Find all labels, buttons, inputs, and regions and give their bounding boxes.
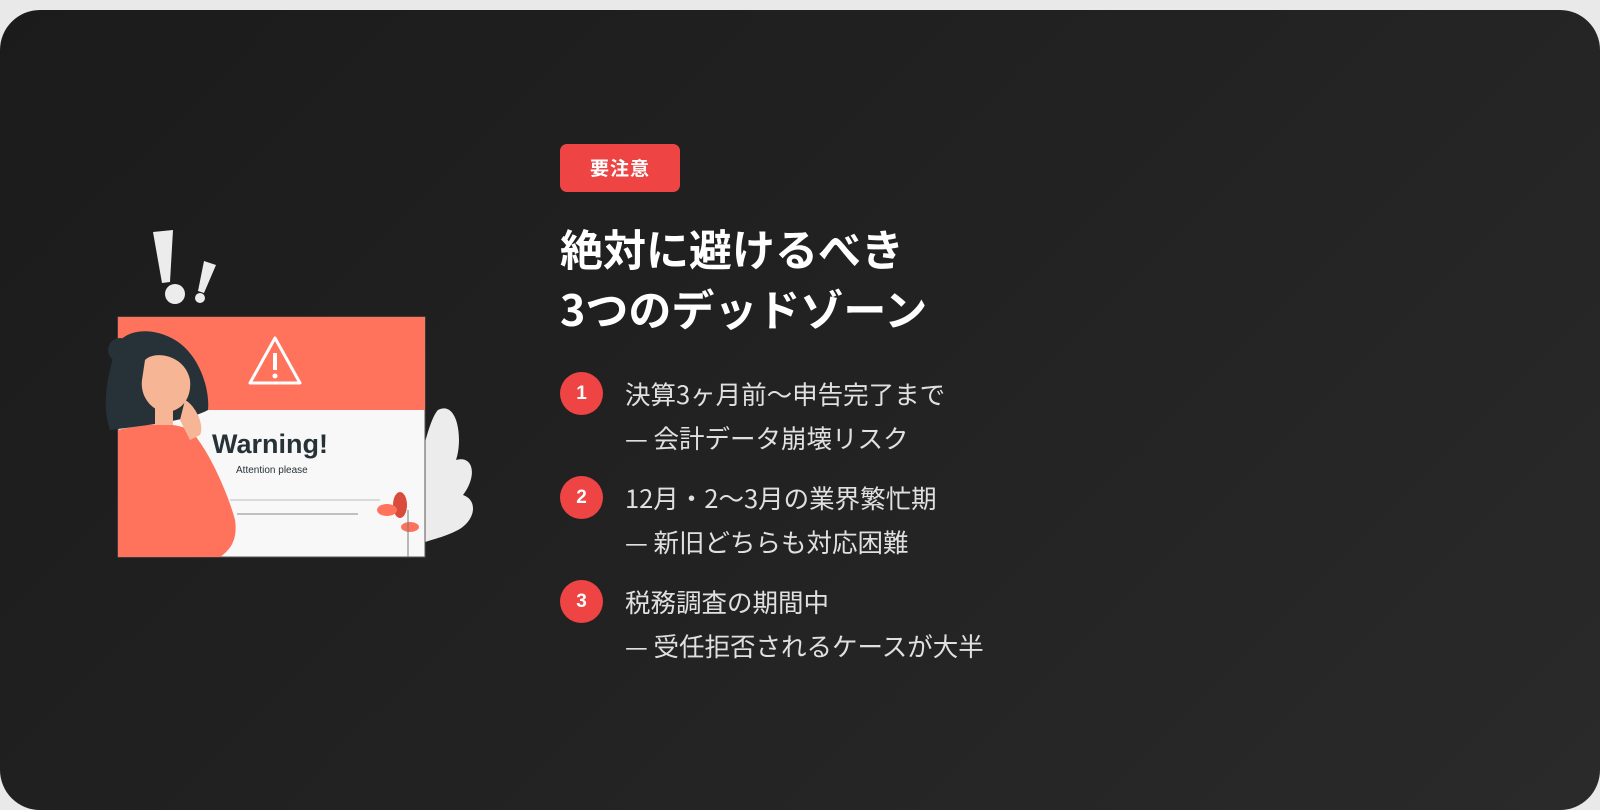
number 2 <box>560 476 603 519</box>
badge: 要注意 <box>560 144 680 192</box>
item 1 <box>560 372 945 456</box>
number 3: 3 <box>576 591 587 612</box>
badge: 要注意: 要注意 <box>590 154 650 181</box>
icon: exclamation marks <box>153 230 216 304</box>
item 2 <box>560 476 937 560</box>
leaf <box>418 408 473 545</box>
number 2: 2 <box>576 487 587 508</box>
number 1 <box>560 372 603 415</box>
warning panel: Warning! <box>212 429 328 459</box>
text 3: 税務調査の期間中 <box>625 582 829 620</box>
text 1: 決算3ヶ月前〜申告完了まで <box>625 374 945 412</box>
text 2: — 新旧どちらも対応困難 <box>625 522 909 560</box>
item 3 <box>560 580 984 664</box>
number 1: 1 <box>576 383 587 404</box>
text 1 <box>625 374 945 456</box>
title: 絶対に避けるべき <box>560 217 904 279</box>
title: 3つのデッドゾーン <box>560 277 927 339</box>
text 3 <box>625 582 984 664</box>
text 2: 12月・2〜3月の業界繁忙期 <box>625 478 937 516</box>
warning panel <box>118 317 425 557</box>
text 2 <box>625 478 937 560</box>
title <box>560 217 927 339</box>
warning panel: Attention please <box>236 465 308 476</box>
illustration: warning <box>106 230 473 558</box>
number 3 <box>560 580 603 623</box>
text 1: — 会計データ崩壊リスク <box>625 418 909 456</box>
woman <box>106 331 236 557</box>
text 3: — 受任拒否されるケースが大半 <box>625 626 984 664</box>
